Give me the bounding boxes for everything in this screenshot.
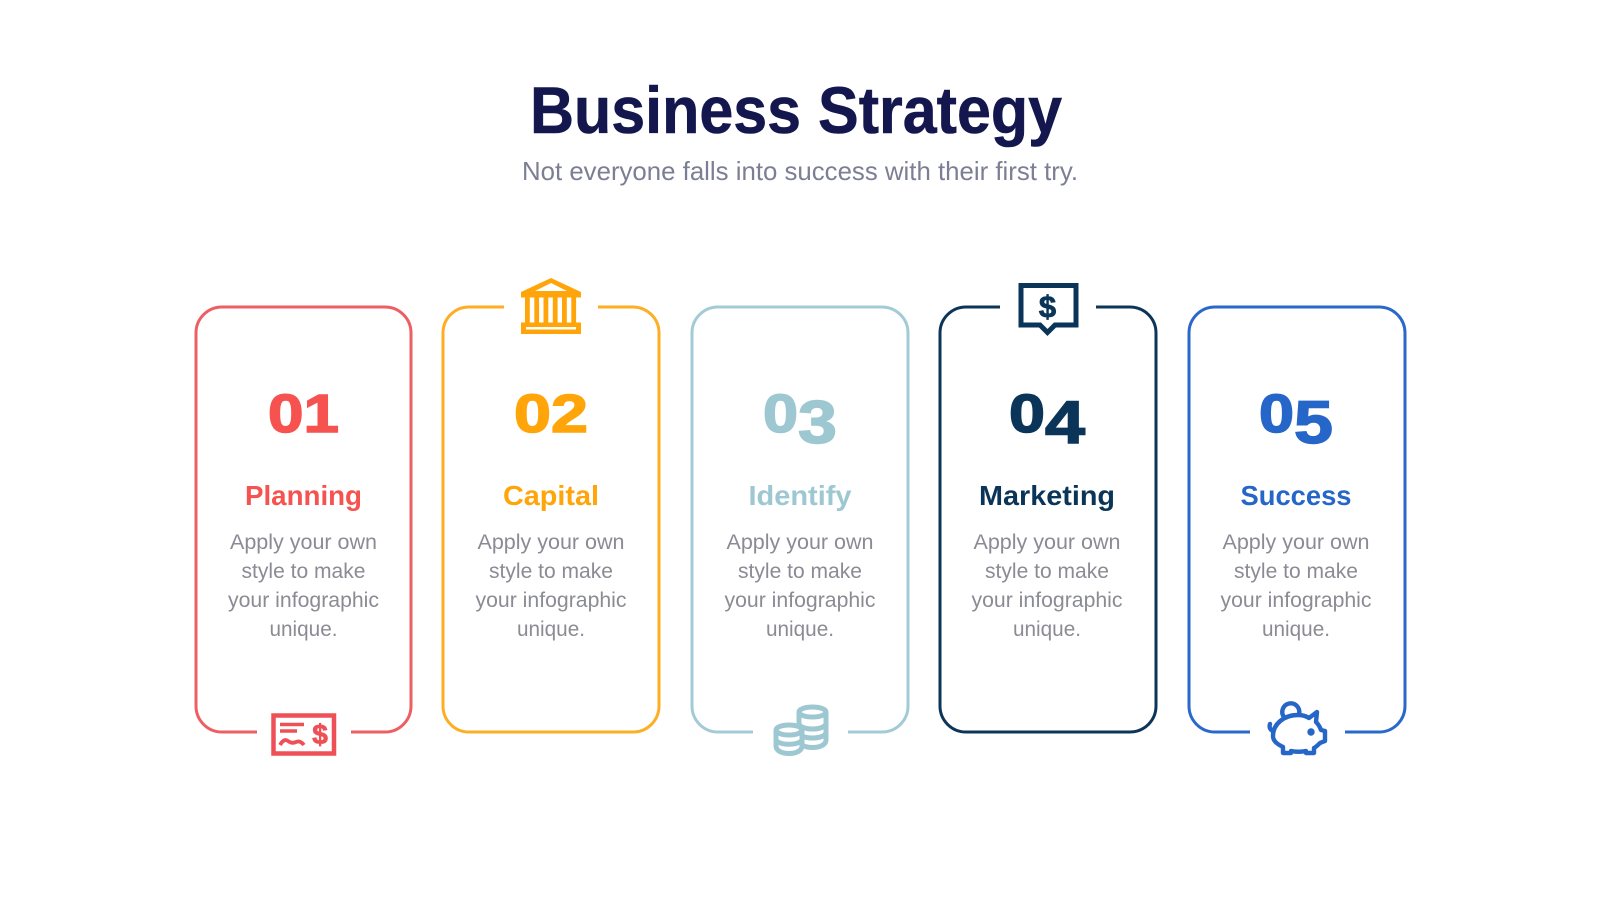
panel: identify [692, 307, 908, 754]
card outline: planning [196, 307, 411, 732]
number 03: 3 [798, 389, 837, 456]
heading: marketing: Marketing [979, 480, 1115, 511]
text block: planning: style to make [242, 559, 366, 583]
text block: identify: your infographic [724, 588, 876, 612]
icon: dollar speech bubble [1021, 286, 1076, 332]
text block: identify [724, 530, 876, 641]
text block: capital: unique. [517, 617, 585, 641]
number 01: 01 [268, 384, 339, 444]
heading: planning: Planning [245, 480, 362, 511]
title: Business Strategy [530, 73, 1062, 147]
panel: capital [443, 278, 659, 732]
heading: capital: Capital [503, 480, 599, 511]
text block: success: Apply your own [1222, 530, 1370, 554]
text block: planning: Apply your own [230, 530, 377, 554]
text block: marketing: unique. [1013, 617, 1081, 641]
text block: marketing: Apply your own [974, 530, 1120, 554]
text block: identify: style to make [738, 559, 862, 583]
text block: identify: Apply your own [726, 530, 874, 554]
number 04: 4 [1045, 389, 1086, 456]
heading: success: Success [1240, 480, 1352, 511]
text block: marketing: style to make [985, 559, 1109, 583]
text block: capital: your infographic [476, 588, 627, 612]
icon: bank check [274, 716, 334, 754]
panel: planning [196, 307, 411, 754]
number 02: 02 [514, 384, 588, 444]
panel: marketing [940, 286, 1156, 732]
heading: identify: Identify [748, 480, 852, 511]
number 04: 0 [1009, 384, 1039, 444]
text block: marketing [972, 530, 1123, 641]
text block: capital: style to make [489, 559, 613, 583]
text block: planning [228, 530, 379, 641]
text block: success: your infographic [1220, 588, 1372, 612]
number 03: 0 [763, 384, 793, 444]
icon: piggy bank [1270, 703, 1325, 753]
panel: success [1189, 307, 1405, 753]
card outline: identify [692, 307, 908, 732]
subtitle: Not everyone falls into success with their first try. [522, 156, 1078, 186]
text block: success: unique. [1262, 617, 1330, 641]
icon: bank building [521, 278, 581, 334]
icon: coin stacks [776, 707, 826, 754]
text block: capital: Apply your own [478, 530, 624, 554]
number 05: 5 [1294, 389, 1333, 456]
card outline: capital [443, 307, 659, 732]
text block: success [1220, 530, 1372, 641]
text block: capital [476, 530, 627, 641]
text block: planning: your infographic [228, 588, 379, 612]
number 05: 0 [1259, 384, 1289, 444]
text block: success: style to make [1234, 559, 1358, 583]
text block: marketing: your infographic [972, 588, 1123, 612]
card outline: marketing [940, 307, 1156, 732]
icon: bank check: $ [312, 719, 328, 750]
text block: planning: unique. [270, 617, 338, 641]
card outline: success [1189, 307, 1405, 732]
icon: dollar speech bubble: $ [1039, 289, 1056, 324]
text block: identify: unique. [766, 617, 834, 641]
